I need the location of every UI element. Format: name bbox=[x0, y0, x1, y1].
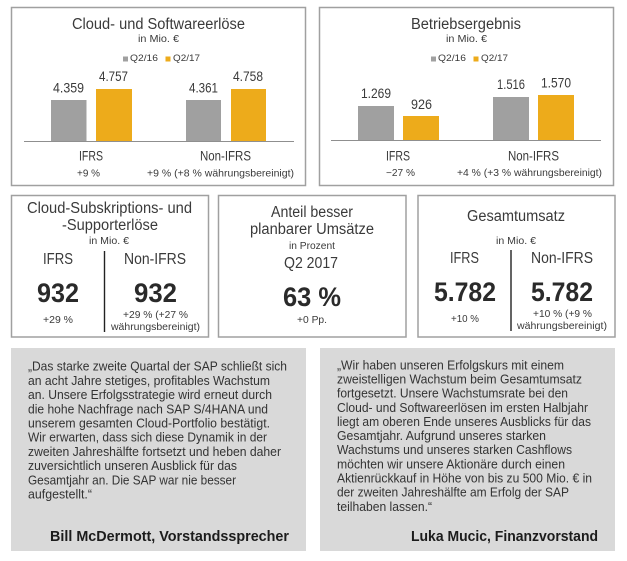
unit label: in Prozent bbox=[289, 241, 335, 252]
values: 932 bbox=[37, 278, 79, 308]
category labels and growth: IFRS bbox=[386, 148, 410, 164]
column labels bbox=[450, 250, 593, 267]
growth notes: währungsbereinigt) bbox=[110, 322, 200, 333]
quote text: „Das starke zweite Quartal der SAP schließt sich bbox=[28, 360, 287, 374]
quote text: unserem gesamten Cloud-Portfolio bestätigt. bbox=[28, 416, 270, 430]
values bbox=[37, 278, 177, 308]
heading: Gesamtumsatz bbox=[467, 208, 565, 225]
category labels and growth: +9 % bbox=[77, 168, 100, 180]
category labels and growth: Non-IFRS bbox=[200, 148, 251, 164]
quote text: „Wir haben unseren Erfolgskurs mit einem bbox=[337, 358, 564, 372]
heading: -Supporterlöse bbox=[62, 217, 158, 234]
growth notes: +29 % bbox=[43, 315, 73, 326]
legend: Q2/16 bbox=[130, 53, 158, 64]
values: 932 bbox=[134, 278, 177, 308]
quote text: möchten wir unsere Aktionäre durch einen bbox=[337, 457, 565, 471]
quote text: Cloud- und Softwareerlösen im ersten Halbjahr bbox=[337, 401, 588, 415]
panel: Cloud- und Softwareerlöse bbox=[12, 8, 306, 186]
legend: Q2/17 bbox=[173, 53, 200, 64]
quote text bbox=[28, 360, 287, 502]
category labels and growth: Non-IFRS bbox=[508, 148, 559, 164]
period label: Q2 2017 bbox=[284, 255, 338, 272]
column labels: IFRS bbox=[450, 250, 479, 267]
values: 5.782 bbox=[531, 277, 593, 307]
category labels and growth: +4 % (+3 % währungsbereinigt) bbox=[457, 168, 602, 179]
bar chart: Cloud- und Softwareerlöse: 4.757 bbox=[99, 69, 128, 84]
value: 63 % bbox=[283, 282, 341, 312]
bar chart: Cloud- und Softwareerlöse: 4.359 bbox=[53, 81, 84, 96]
legend bbox=[431, 53, 508, 64]
bar chart: Betriebsergebnis bbox=[331, 76, 601, 140]
category labels and growth: IFRS bbox=[79, 148, 103, 164]
legend bbox=[123, 53, 200, 64]
heading: Betriebsergebnis: Betriebsergebnis bbox=[411, 16, 521, 33]
quote text: aufgestellt.“ bbox=[28, 488, 92, 502]
quote text: zweiten Jahreshälfte fortsetzt und heben daher bbox=[28, 445, 281, 459]
panel: Cloud-Subskriptions- und -Supporterlöse bbox=[12, 196, 208, 337]
bar chart: Betriebsergebnis: 1.570 bbox=[541, 76, 571, 91]
quote text: Wachstums und unseres starken Cashflows bbox=[337, 443, 572, 457]
heading: Cloud- und Softwareerlöse: Cloud- und Softwareerlöse bbox=[72, 16, 245, 33]
quote text: teilhaben lassen.“ bbox=[337, 500, 432, 514]
bar chart: Betriebsergebnis: 1.269 bbox=[361, 86, 391, 101]
quote text: zweistelligen Wachstum beim Gesamtumsatz bbox=[337, 372, 582, 386]
category labels and growth: −27 % bbox=[386, 168, 415, 179]
column labels: Non-IFRS bbox=[124, 251, 186, 268]
bar chart: Betriebsergebnis: 1.516 bbox=[497, 77, 525, 92]
attribution: Luka Mucic, Finanzvorstand bbox=[411, 529, 598, 545]
column labels bbox=[43, 251, 186, 268]
growth notes: +10 % bbox=[451, 314, 479, 325]
panel: quote Luka Mucic bbox=[320, 348, 615, 551]
quote text: Wir erwarten, dass sich diese Dynamik in der bbox=[28, 431, 267, 445]
growth notes: +10 % (+9 % bbox=[533, 309, 592, 320]
panel: Gesamtumsatz bbox=[418, 196, 615, 337]
unit label: in Mio. € bbox=[89, 236, 129, 247]
column labels: Non-IFRS bbox=[531, 250, 593, 267]
quote text: der zweiten Jahreshälfte am Erfolg der SAP bbox=[337, 486, 569, 500]
growth notes bbox=[451, 309, 607, 332]
values bbox=[434, 277, 593, 307]
quote text: an. Unsere Erfolgsstrategie wird erneut durch bbox=[28, 388, 272, 402]
growth note: +0 Pp. bbox=[297, 315, 327, 326]
legend: Q2/17 bbox=[481, 53, 508, 64]
unit label: in Mio. € bbox=[446, 34, 487, 45]
attribution: Bill McDermott, Vorstandssprecher bbox=[50, 529, 289, 545]
heading bbox=[27, 200, 192, 234]
quote text: die hohe Nachfrage nach SAP S/4HANA und bbox=[28, 402, 268, 416]
values: 5.782 bbox=[434, 277, 496, 307]
column labels: IFRS bbox=[43, 251, 73, 268]
heading: planbarer Umsätze bbox=[250, 221, 374, 238]
bar chart: Cloud- und Softwareerlöse bbox=[24, 69, 294, 142]
unit label: in Mio. € bbox=[138, 34, 179, 45]
panel: quote Bill McDermott bbox=[11, 348, 306, 551]
unit label: in Mio. € bbox=[496, 236, 536, 247]
panel: Betriebsergebnis bbox=[320, 8, 614, 186]
quote text: fortgesetzt. Unsere Wachstumsrate bei den bbox=[337, 387, 568, 401]
quote text: Aktienrückkauf in Höhe von bis zu 500 Mio. € in bbox=[337, 472, 592, 486]
panel: Anteil besser planbarer Umsätze bbox=[218, 196, 406, 337]
legend: Q2/16 bbox=[438, 53, 466, 64]
heading bbox=[250, 204, 374, 238]
growth notes bbox=[43, 310, 200, 333]
bar chart: Cloud- und Softwareerlöse: 4.361 bbox=[189, 81, 218, 96]
bar chart: Betriebsergebnis: 926 bbox=[411, 97, 432, 112]
category labels and growth: +9 % (+8 % währungsbereinigt) bbox=[147, 168, 294, 180]
quote text: Gesamtjahr an. Die SAP war nie besser bbox=[28, 473, 236, 487]
quote text: zuversichtlich unseren Ausblick für das bbox=[28, 459, 237, 473]
heading: Cloud-Subskriptions- und bbox=[27, 200, 192, 217]
quote text bbox=[337, 358, 592, 514]
heading: Anteil besser bbox=[271, 204, 353, 221]
category labels and growth bbox=[386, 148, 602, 179]
bar chart: Cloud- und Softwareerlöse: 4.758 bbox=[233, 69, 263, 84]
quote text: an acht Jahre stetiges, profitables Wachstum bbox=[28, 374, 270, 388]
growth notes: +29 % (+27 % bbox=[123, 310, 188, 321]
quote text: liegt am oberen Ende unseres Ausblicks für das bbox=[337, 415, 591, 429]
growth notes: währungsbereinigt) bbox=[516, 321, 607, 332]
quote text: Gesamtjahr. Aufgrund unseres starken bbox=[337, 429, 546, 443]
category labels and growth bbox=[77, 148, 294, 180]
